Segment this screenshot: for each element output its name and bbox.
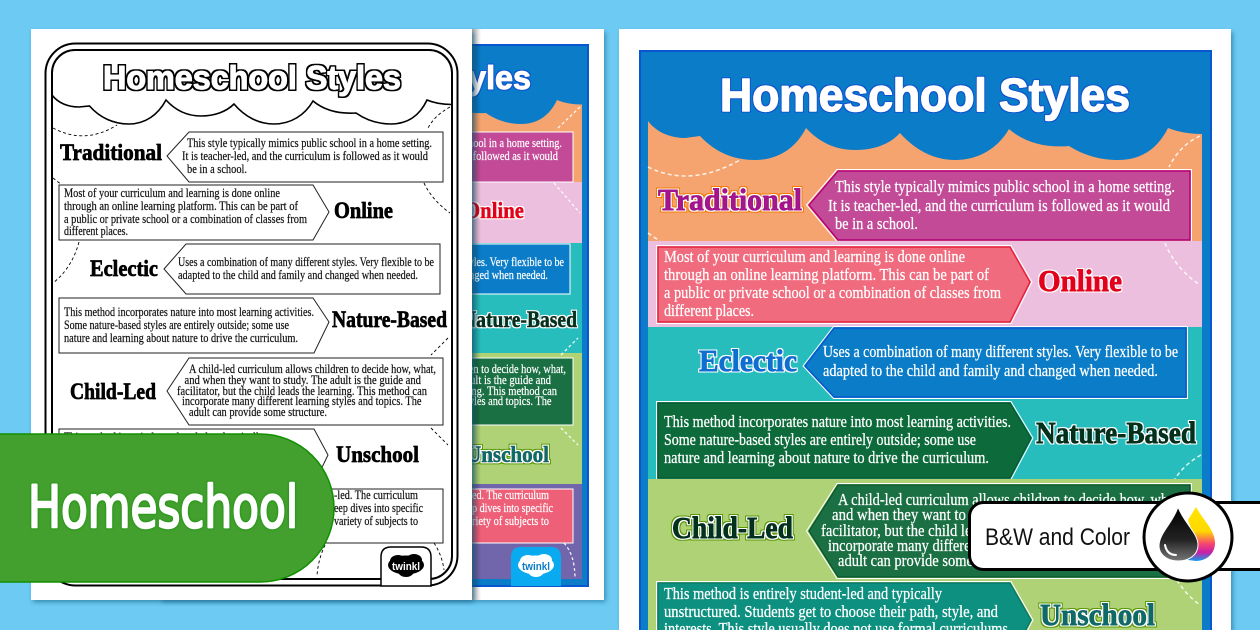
label: Online: Online xyxy=(464,198,524,223)
description arrow: Child-Led: and when they want to study. The adult is the guide and xyxy=(184,373,421,387)
description arrow: Child-Led: incorporate many different learning styles and topics. The xyxy=(182,394,422,408)
description arrow: Eclectic: adapted to the child and family and changed when needed. xyxy=(823,361,1158,380)
label: Nature-Based: Nature-Based xyxy=(462,307,577,332)
description arrow: Nature-Based: Some nature-based styles are entirely outside; some use xyxy=(664,430,976,449)
colour poster frame xyxy=(161,45,588,586)
label: Eclectic: Eclectic xyxy=(90,256,158,281)
label: Eclectic: Eclectic xyxy=(699,343,797,378)
back colour poster card xyxy=(160,29,606,602)
row: Traditional xyxy=(60,132,443,182)
Eclectic description box xyxy=(294,244,570,294)
description arrow: Traditional xyxy=(167,132,443,182)
panel: Eclectic and Nature-Based xyxy=(648,326,1202,482)
label: Unschool: Unschool xyxy=(336,442,419,467)
colour poster title: Homeschool Styles xyxy=(233,59,531,96)
row: Unschool xyxy=(59,429,419,484)
description arrow: Nature-Based xyxy=(656,402,1033,480)
description arrow: Online: Most of your curriculum and learning is done online xyxy=(664,247,965,266)
panel: Child-Led and Unschool xyxy=(648,479,1202,630)
description arrow: Child-Led: adult can provide some structure. xyxy=(189,405,327,419)
description arrow: Child-Led: A child-led curriculum allows children to decide how, what, xyxy=(838,490,1182,509)
badge: B&W and Color xyxy=(970,493,1260,581)
description arrow: Online xyxy=(656,246,1032,324)
Eclectic description box: adapted to the child and family and changed when needed. xyxy=(308,268,548,282)
panel: Online xyxy=(648,241,1202,327)
row: Nature-Based xyxy=(59,298,447,353)
description arrow: Eclectic xyxy=(164,244,440,294)
description arrow: Traditional: be in a school. xyxy=(835,214,918,233)
description arrow: Child-Led: facilitator, but the child leads the learning. This method can xyxy=(177,384,427,398)
description arrow: Eclectic xyxy=(803,326,1188,398)
description arrow: Nature-Based: nature and learning about nature to drive the curriculum. xyxy=(664,448,989,467)
description arrow: Unschool xyxy=(59,429,328,484)
label: Child-Led: Child-Led xyxy=(672,510,793,545)
row: Online xyxy=(59,185,393,240)
description arrow: Child-Led: and when they want to study. The adult is the guide and xyxy=(832,505,1162,524)
label: Traditional: Traditional xyxy=(658,182,802,217)
row: Eclectic xyxy=(90,244,440,294)
Traditional description box xyxy=(297,132,573,182)
description arrow: Child-Led xyxy=(167,358,443,425)
row: Child-Led xyxy=(70,358,443,425)
last description box xyxy=(440,488,573,543)
description arrow: Online: a public or private school or a combination of classes from xyxy=(664,283,1001,302)
label: Child-Led: Child-Led xyxy=(70,379,156,404)
description arrow: Traditional: It is teacher-led, and the curriculum is followed as it would xyxy=(828,196,1171,215)
banner text: Homeschool xyxy=(28,473,298,541)
badge text: B&W and Color xyxy=(985,524,1130,551)
description arrow: Nature-Based: This method incorporates nature into most learning activities. xyxy=(64,305,314,319)
last description box: p dives into specific xyxy=(472,501,553,515)
label: Online: Online xyxy=(334,198,393,223)
Traditional description box: It is teacher-led, and the curriculum is followed as it would xyxy=(312,149,558,163)
last description box xyxy=(300,488,443,543)
last description box: eep dives into specific xyxy=(334,501,423,515)
description arrow: Unschool: This method is entirely student-led and typically xyxy=(664,584,943,603)
Child-Led description box: facilitator, but the child leads the learning. This method can xyxy=(307,384,557,398)
description arrow: Eclectic: Uses a combination of many different styles. Very flexible to be xyxy=(823,342,1178,361)
description arrow: Child-Led: facilitator, but the child leads the learning. This method can xyxy=(821,521,1168,540)
poster frame and header xyxy=(640,51,1211,630)
poster title: Homeschool Styles xyxy=(720,69,1130,121)
label: Traditional: Traditional xyxy=(60,140,162,165)
description arrow: Online: through an online learning platform. This can be part of xyxy=(664,265,989,284)
description arrow: Child-Led: incorporate many different learning styles and topics. The xyxy=(828,536,1160,555)
description arrow: Traditional: It is teacher-led, and the curriculum is followed as it would xyxy=(182,149,428,163)
description arrow: Traditional xyxy=(806,170,1192,242)
label: Nature-Based: Nature-Based xyxy=(1036,415,1196,450)
panel: Traditional xyxy=(648,121,1202,242)
front card shadow on back poster xyxy=(472,29,481,600)
description arrow: Unschool: unstructured. Students get to choose their path, style, and xyxy=(664,602,999,621)
description arrow: Nature-Based xyxy=(59,298,329,353)
description arrow: Online xyxy=(59,185,329,240)
banner: Homeschool xyxy=(0,434,334,582)
description arrow: Traditional: This style typically mimics public school in a home setting. xyxy=(835,177,1175,196)
description arrow: Online: different places. xyxy=(664,301,754,320)
description arrow: Child-Led: A child-led curriculum allows children to decide how, what, xyxy=(189,362,436,376)
description arrow: Traditional: This style typically mimics public school in a home setting. xyxy=(187,136,432,150)
description arrow: Online: different places. xyxy=(64,224,128,238)
last description box: variety of subjects to xyxy=(334,514,418,528)
last description box: riety of subjects to xyxy=(472,514,549,528)
Child-Led description box: incorporate many different learning styles and topics. The xyxy=(312,394,552,408)
description arrow: Traditional: be in a school. xyxy=(187,162,247,176)
Eclectic description box: Uses a combination of many different styles. Very flexible to be xyxy=(308,255,564,269)
description arrow: Eclectic: Uses a combination of many different styles. Very flexible to be xyxy=(178,255,434,269)
description arrow: Online: a public or private school or a combination of classes from xyxy=(64,212,307,226)
Traditional description box: This style typically mimics public school in a home setting. xyxy=(317,136,562,150)
last description box: -led. The curriculum xyxy=(334,488,418,502)
icon: ink drops xyxy=(1144,493,1232,581)
description arrow: Online: Most of your curriculum and learning is done online xyxy=(64,186,280,200)
description arrow: Eclectic: adapted to the child and family and changed when needed. xyxy=(178,268,418,282)
description arrow: Child-Led xyxy=(806,484,1192,578)
description arrow: Nature-Based: nature and learning about nature to drive the curriculum. xyxy=(64,331,298,345)
description arrow: Nature-Based: This method incorporates nature into most learning activities. xyxy=(664,412,1011,431)
description arrow: Nature-Based: Some nature-based styles are entirely outside; some use xyxy=(64,318,289,332)
black and white title: Homeschool Styles xyxy=(103,59,401,96)
main colour poster card xyxy=(619,29,1233,630)
Child-Led description box: A child-led curriculum allows children to decide how, what, xyxy=(319,362,566,376)
description arrow: Unschool xyxy=(656,582,1033,630)
twinkl logo black and white: twinkl xyxy=(392,561,420,573)
description arrow: Unschool: This method is entirely student-led and typically xyxy=(64,430,265,444)
label: Online: Online xyxy=(1038,263,1122,298)
label: Unschool: Unschool xyxy=(466,442,549,467)
twinkl logo colour xyxy=(511,547,561,586)
description arrow: Online: through an online learning platform. This can be part of xyxy=(64,199,299,213)
Child-Led description box xyxy=(297,358,573,425)
last description box: ed. The curriculum xyxy=(472,488,549,502)
twinkl logo colour: twinkl xyxy=(522,561,550,573)
black and white frame xyxy=(46,44,458,586)
description arrow: Child-Led: adult can provide some structure. xyxy=(838,551,1031,570)
Child-Led description box: and when they want to study. The adult is the guide and xyxy=(314,373,551,387)
twinkl logo black and white xyxy=(381,547,431,586)
front black and white poster card xyxy=(31,29,474,602)
label: Nature-Based: Nature-Based xyxy=(332,307,447,332)
